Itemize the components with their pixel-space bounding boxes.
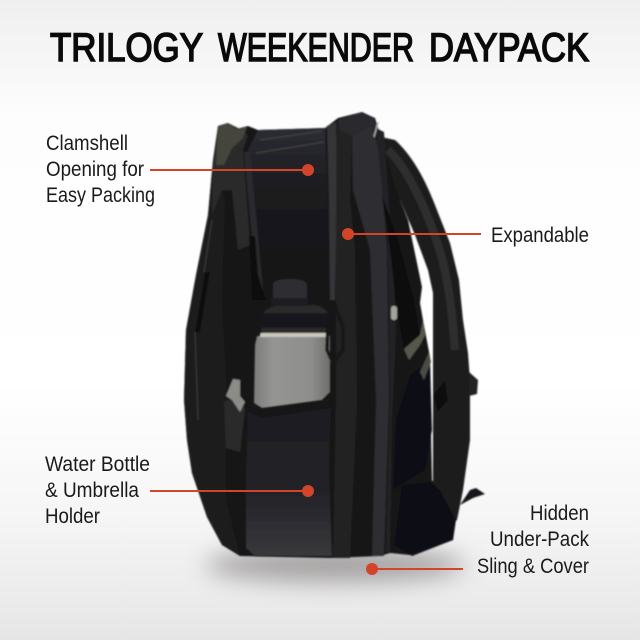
collar knurl bbox=[260, 313, 330, 328]
callout: expandable: Expandable bbox=[491, 224, 589, 247]
left panel bbox=[184, 160, 240, 556]
callout: expandable bbox=[342, 224, 589, 247]
callout: water bottle holder: Holder bbox=[45, 505, 100, 528]
white stitching on top bbox=[374, 122, 378, 137]
side seam bbox=[195, 220, 212, 420]
centre tape right bbox=[333, 122, 357, 558]
main body bbox=[184, 112, 455, 558]
left fold tapes bbox=[212, 123, 250, 250]
centre gusset bbox=[248, 128, 331, 300]
olive top edge bbox=[216, 123, 247, 165]
gusset side tape bbox=[244, 152, 264, 300]
callout: hidden sling: Hidden bbox=[530, 502, 589, 525]
callout: water bottle holder: & Umbrella bbox=[45, 479, 139, 502]
ground shadow bbox=[205, 548, 465, 582]
callout: hidden sling bbox=[366, 502, 589, 578]
lower gusset left seam bbox=[249, 236, 266, 300]
water bottle bbox=[254, 279, 343, 408]
title bbox=[50, 26, 589, 70]
strap tab bbox=[460, 488, 485, 505]
title: TRILOGY bbox=[50, 26, 203, 70]
bottle neck bbox=[271, 298, 308, 306]
mesh back panel bbox=[382, 195, 420, 350]
backpack illustration bbox=[184, 112, 485, 558]
carabiner bbox=[318, 304, 343, 363]
right tape narrow bbox=[376, 128, 396, 552]
shoulder strap bbox=[372, 135, 470, 530]
mesh pocket bbox=[246, 398, 332, 556]
title: WEEKENDER bbox=[218, 26, 414, 70]
callout: water bottle holder bbox=[45, 453, 314, 528]
lower strap webbing bbox=[394, 482, 456, 556]
callout: hidden sling: Under-Pack bbox=[490, 528, 589, 551]
callout: hidden sling: Sling & Cover bbox=[477, 555, 589, 578]
bottle cap bbox=[273, 279, 307, 298]
pocket band bbox=[248, 398, 331, 418]
bottle body bbox=[254, 336, 330, 408]
lower mesh panel bbox=[393, 360, 432, 490]
title: DAYPACK bbox=[429, 26, 589, 70]
strap buckle bbox=[469, 372, 478, 396]
bottle collar bbox=[260, 305, 330, 333]
top handle bbox=[338, 112, 376, 136]
zipper metal bbox=[226, 379, 245, 412]
strap loop bbox=[433, 380, 448, 412]
olive side trim lower bbox=[420, 352, 431, 380]
gusset seam lines bbox=[256, 131, 324, 153]
callout: clamshell opening: Easy Packing bbox=[46, 184, 155, 207]
bottle shine ring bbox=[260, 333, 328, 337]
centre tape bbox=[327, 122, 338, 300]
strap edge highlight bbox=[388, 150, 455, 350]
zipper pull right bbox=[391, 306, 397, 320]
callout: clamshell opening: Clamshell bbox=[46, 132, 128, 155]
callout: water bottle holder: Water Bottle bbox=[45, 453, 150, 476]
right tape wide bbox=[352, 126, 389, 556]
olive side trim upper bbox=[404, 320, 425, 360]
callout: clamshell opening bbox=[46, 132, 314, 207]
zipper tab bbox=[224, 398, 245, 452]
callout: clamshell opening: Opening for bbox=[46, 158, 144, 181]
side zipper bbox=[195, 272, 210, 332]
